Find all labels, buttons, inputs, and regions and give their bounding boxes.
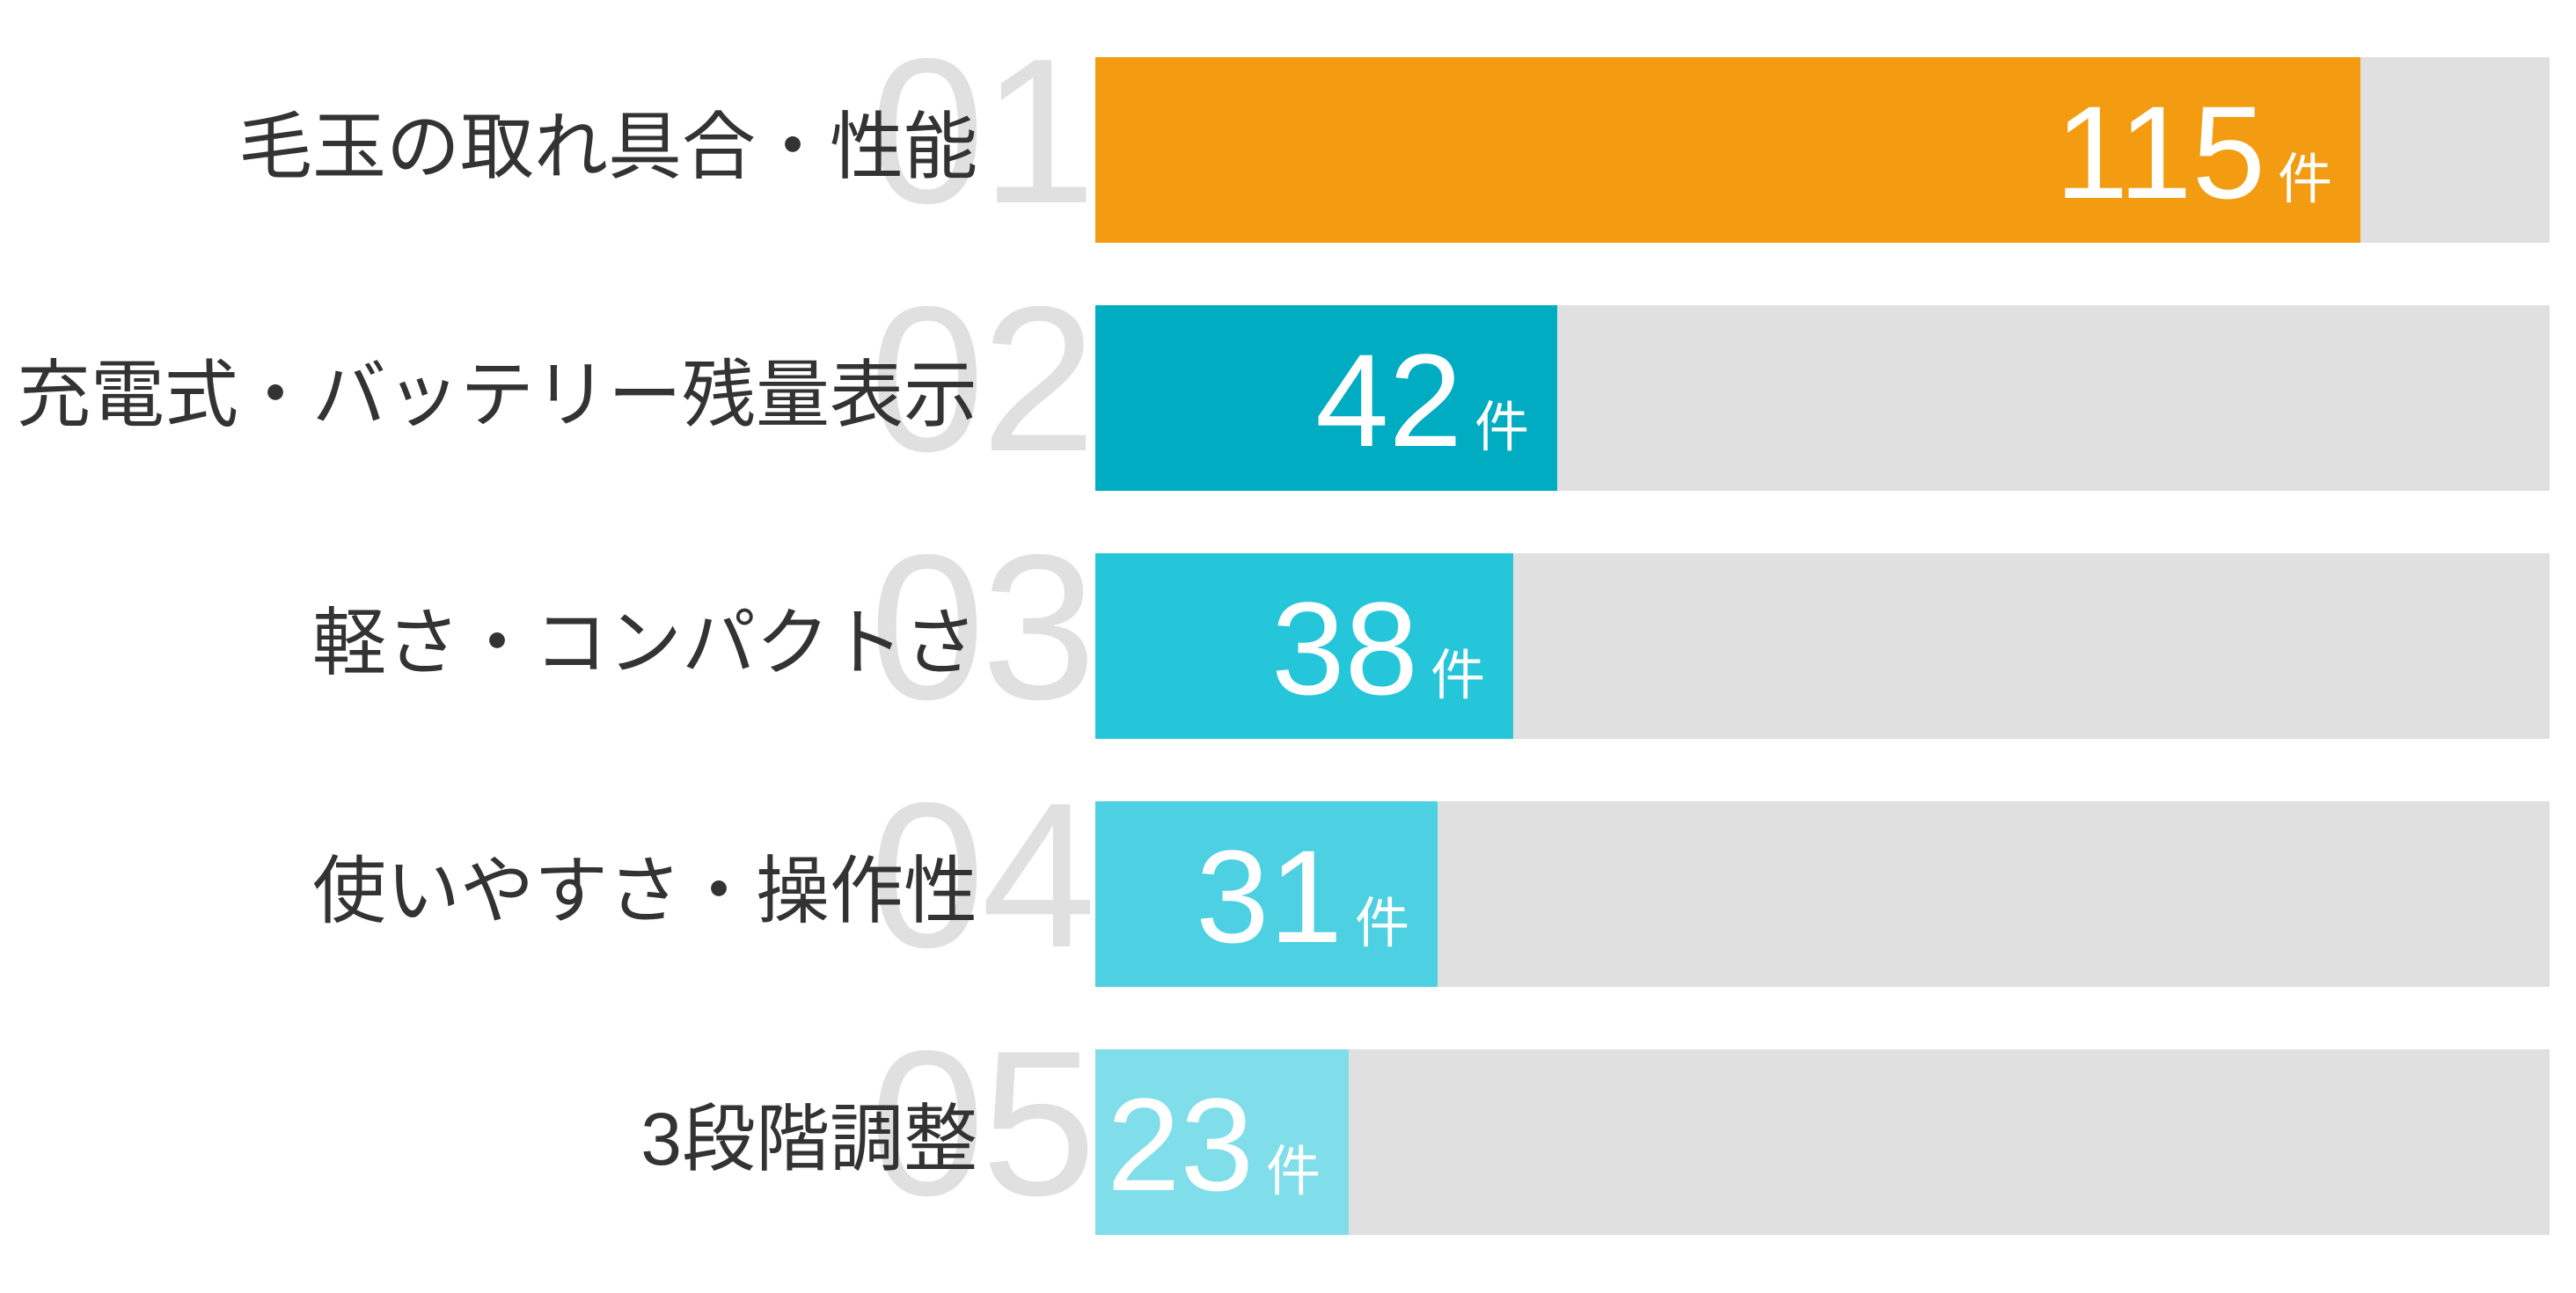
row 5 <box>640 1007 2550 1238</box>
bar 3: 38件 <box>1271 574 1485 722</box>
bar 1: 115件 <box>2055 78 2332 226</box>
bar 5 <box>1095 1049 2550 1235</box>
bar 1 <box>1095 57 2550 243</box>
bar 5: 23件 <box>1107 1070 1321 1218</box>
row 1 <box>238 15 2550 246</box>
label 1: 毛玉の取れ具合・性能 <box>238 106 977 188</box>
label 3: 軽さ・コンパクトさ <box>312 602 977 684</box>
bar 4: 31件 <box>1196 822 1409 970</box>
bar 4 <box>1095 801 2550 987</box>
rank number 03: 03 <box>870 511 1093 742</box>
bar 2: 42件 <box>1315 326 1529 474</box>
row 3 <box>312 511 2550 742</box>
rank number 05: 05 <box>870 1007 1093 1238</box>
label 2: 充電式・バッテリー残量表示 <box>17 354 977 436</box>
row 2 <box>17 263 2550 494</box>
bar 2 <box>1095 305 2550 491</box>
bar 3 <box>1095 553 2550 739</box>
label 4: 使いやすさ・操作性 <box>312 850 977 932</box>
rank number 02: 02 <box>870 263 1093 494</box>
rank number 01: 01 <box>870 15 1093 246</box>
row 4 <box>312 759 2550 990</box>
label 5: 3段階調整 <box>640 1098 977 1180</box>
rank number 04: 04 <box>870 759 1093 990</box>
